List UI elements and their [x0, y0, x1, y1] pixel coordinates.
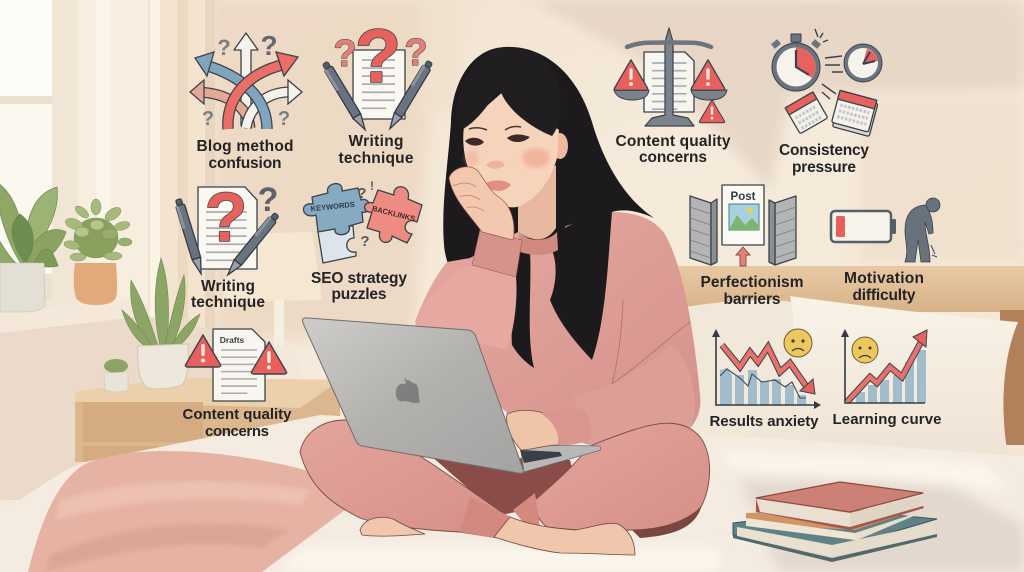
label: writing technique top: Writing: [348, 133, 404, 150]
red puzzle piece: [365, 187, 422, 243]
laptop lid: [303, 318, 524, 473]
neck: [518, 165, 556, 239]
text lines: [362, 60, 395, 108]
chart: results anxiety: [712, 329, 821, 409]
right cuff: [513, 493, 540, 528]
label: SEO strategy puzzles: SEO strategy: [311, 270, 407, 287]
label: content quality concerns lower: concerns: [205, 423, 269, 440]
arrowhead: [913, 330, 927, 347]
question marks: [357, 179, 374, 250]
pen right: [224, 212, 280, 278]
red rising line: [847, 342, 921, 402]
right leg: [535, 423, 710, 531]
axes: [845, 334, 925, 403]
wall left: [690, 196, 717, 265]
question marks: ?: [217, 35, 231, 60]
arrowhead: [800, 379, 815, 394]
wall right: [769, 196, 796, 265]
small question mark left: ?: [333, 33, 357, 75]
book: teal: [733, 510, 937, 562]
nightstand: [75, 378, 340, 462]
small clock: [844, 44, 882, 82]
grey question mark: ?: [258, 181, 278, 219]
label: writing technique left: technique: [191, 294, 265, 311]
pen left: [321, 61, 369, 132]
text lines: [206, 212, 246, 260]
brows: [469, 126, 521, 130]
backlinks label: BACKLINKS: [371, 204, 416, 223]
sweater body: [415, 212, 700, 445]
hand supporting chin: [449, 167, 514, 240]
document: [213, 329, 265, 401]
red zig-zag: [722, 345, 806, 386]
arrowhead: blue: [195, 52, 214, 76]
stopwatch: [771, 34, 821, 91]
question marks: [202, 30, 290, 130]
question marks: ?: [357, 185, 367, 202]
pillow: left: [678, 300, 830, 432]
doc lines: [221, 350, 257, 393]
plant: terracotta pot: [63, 199, 132, 305]
document: [198, 187, 257, 269]
big question mark: ?: [355, 14, 401, 99]
blue arrow: [205, 65, 267, 129]
label: learning curve: Learning curve: [832, 411, 942, 428]
question marks: ?: [202, 108, 214, 130]
axes: [716, 334, 818, 405]
up arrow: [234, 33, 258, 125]
keyboard: [520, 450, 562, 463]
warning right: [251, 342, 287, 374]
axis arrow y: [841, 329, 849, 337]
lamp: [222, 232, 322, 388]
axis arrow x: [814, 401, 821, 409]
right white arrow: [246, 92, 290, 128]
icon: consistency pressure: [771, 29, 882, 136]
pillow: right: [745, 296, 1018, 456]
label: writing technique left: Writing: [201, 278, 255, 295]
drafts label: Drafts: [220, 335, 245, 345]
label: motivation difficulty: difficulty: [852, 287, 916, 304]
sad face: [852, 337, 878, 363]
small warning: [699, 100, 725, 123]
pen left: [174, 198, 205, 275]
arrowhead: red: [276, 52, 298, 76]
left warning: [614, 60, 648, 90]
icon: perfectionism barriers: [690, 185, 796, 266]
hand on keyboard: [507, 410, 559, 450]
question marks: ?: [360, 233, 370, 250]
calendar left: [785, 92, 828, 134]
curtain: [78, 0, 215, 400]
left pink arrow: [198, 92, 250, 128]
pole and base: [645, 28, 694, 126]
small question mark right: ?: [404, 32, 428, 74]
collar: [519, 232, 558, 255]
left arm: [415, 265, 517, 350]
question marks: ?: [260, 30, 278, 61]
ear: [552, 133, 568, 159]
book: red: [756, 482, 924, 530]
icon: drafts warnings: [185, 329, 287, 401]
right cuff: [540, 408, 591, 445]
red arrow: [228, 64, 286, 129]
left cuff: [460, 497, 511, 538]
eyes: [465, 134, 530, 146]
window: [0, 0, 78, 300]
icon: content quality scale: [614, 28, 727, 126]
lips: [485, 180, 511, 191]
pale puzzle piece: [318, 226, 356, 263]
label: writing technique top: technique: [338, 150, 414, 167]
bars: [856, 350, 926, 403]
arrow up: [736, 247, 750, 266]
logo: [396, 377, 420, 403]
label: SEO strategy puzzles: puzzles: [332, 286, 386, 303]
icon: blog method confusion: [190, 30, 302, 130]
beam: [627, 42, 711, 47]
under-knee shadow: [632, 505, 702, 538]
arrowhead: left pink: [190, 80, 204, 104]
axis arrow y: [712, 329, 720, 337]
post title: Post: [731, 191, 756, 203]
left cuff: [472, 230, 522, 277]
left pan: [614, 90, 649, 100]
sleeve seams: [612, 300, 690, 384]
window sill and lower wall: [0, 298, 215, 500]
battery: [831, 211, 891, 242]
woman: [415, 47, 700, 445]
label: blog method confusion: Blog method: [196, 138, 294, 155]
book: orange: [746, 508, 923, 541]
question marks: ?: [278, 108, 290, 130]
bangs: [456, 47, 561, 136]
pen right: [386, 60, 434, 131]
text lines: [652, 63, 686, 109]
blanket: [28, 451, 345, 572]
right warning: [691, 60, 725, 90]
hair back: [443, 47, 654, 368]
keywords label: KEYWORDS: [310, 200, 355, 213]
fingers: [453, 183, 484, 211]
sad face: [784, 329, 812, 357]
books: [733, 482, 937, 562]
pants: [300, 420, 710, 538]
icon: writing technique top: [321, 14, 434, 132]
question marks: !: [370, 179, 374, 193]
warning left: [185, 335, 221, 367]
document: [353, 50, 405, 119]
label: perfectionism barriers: Perfectionism: [700, 274, 804, 291]
right pan: [691, 90, 727, 100]
left leg: [300, 420, 510, 538]
headboard: [675, 266, 1024, 445]
calendar right: [831, 90, 879, 136]
icon: motivation battery and slumped person: [831, 198, 940, 262]
blush: [465, 148, 550, 168]
nose: [486, 160, 505, 169]
plant: large leaf on sill: [0, 183, 66, 312]
battery charge: [836, 216, 845, 237]
label: consistency pressure: pressure: [792, 159, 856, 176]
laptop: [303, 318, 601, 473]
face: [463, 90, 559, 207]
label: consistency pressure: Consistency: [779, 142, 869, 159]
label: content quality concerns top: Content quality: [616, 133, 731, 150]
label: blog method confusion: confusion: [208, 155, 282, 172]
hair strand over sweater: [547, 212, 612, 360]
shadow under laptop: [430, 455, 580, 515]
chart: learning curve: [841, 329, 927, 403]
document: [644, 52, 694, 112]
label: content quality concerns top: concerns: [639, 149, 707, 166]
big question mark: ?: [205, 178, 247, 256]
bed sheet: [0, 415, 1024, 572]
label: results anxiety: Results anxiety: [710, 413, 819, 430]
plant: small succulent: [104, 359, 128, 392]
laptop base: [520, 445, 601, 472]
bars: [720, 368, 806, 405]
right arm: [573, 345, 695, 445]
label: content quality concerns lower: Content quality: [182, 406, 292, 423]
icon: writing technique left: [174, 178, 280, 278]
arrowhead: right white: [288, 80, 302, 104]
battery tip: [891, 219, 896, 234]
motion lines: [815, 29, 843, 99]
picture: [729, 204, 759, 230]
icon: SEO puzzles: [303, 179, 422, 263]
dark line: [720, 369, 806, 398]
plant: tall leaves with white pot: [122, 258, 200, 389]
blue puzzle piece: [303, 184, 369, 235]
label: motivation difficulty: Motivation: [844, 270, 924, 287]
falling arrow: [931, 245, 937, 257]
feet: [360, 517, 635, 555]
person: [905, 198, 940, 262]
post sheet: [722, 185, 764, 245]
label: perfectionism barriers: barriers: [724, 291, 780, 308]
